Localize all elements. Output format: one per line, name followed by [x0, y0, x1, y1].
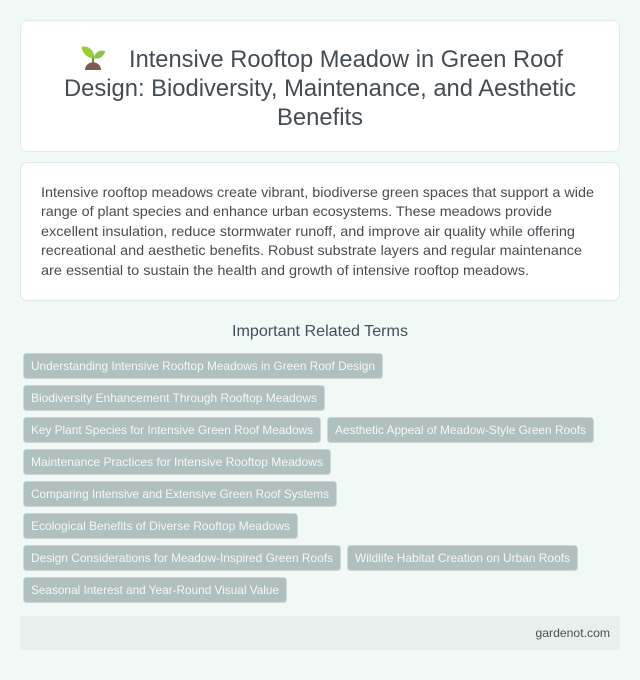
- title text: Design: Biodiversity, Maintenance, and Aesthetic: [64, 75, 576, 102]
- summary text: recreational and aesthetic benefits. Robust substrate layers and regular maintenance: [41, 242, 582, 258]
- tag: comparing: [24, 482, 336, 506]
- tag: design: Design Considerations for Meadow-Inspired Green Roofs: [31, 551, 333, 565]
- tag: understanding: Understanding Intensive Rooftop Meadows in Green Roof Design: [31, 359, 375, 373]
- tag: design: [24, 546, 340, 570]
- summary text: range of plant species and enhance urban ecosystems. These meadows provide: [41, 203, 552, 219]
- icon: seedling: [82, 46, 105, 70]
- panel: title card: [20, 20, 620, 152]
- title text: [64, 46, 576, 131]
- summary text: are essential to sustain the health and growth of intensive rooftop meadows.: [41, 262, 529, 278]
- tag: comparing: Comparing Intensive and Extensive Green Roof Systems: [31, 487, 329, 501]
- summary text: Intensive rooftop meadows create vibrant, biodiverse green spaces that support a wide: [41, 184, 594, 200]
- tag: maintenance: Maintenance Practices for Intensive Rooftop Meadows: [31, 455, 323, 469]
- panel: summary: [20, 162, 620, 300]
- summary text: excellent insulation, reduce stormwater runoff, and improve air quality while offering: [41, 223, 575, 239]
- tag: wildlife: Wildlife Habitat Creation on Urban Roofs: [355, 551, 570, 565]
- summary text: [41, 184, 594, 278]
- tag: wildlife: [348, 546, 578, 570]
- tag: plant species: [24, 418, 320, 442]
- title text: Benefits: [277, 104, 363, 131]
- footer: gardenot.com: [536, 626, 610, 640]
- tag: ecological: Ecological Benefits of Diverse Rooftop Meadows: [31, 519, 290, 533]
- tag: plant species: Key Plant Species for Intensive Green Roof Meadows: [31, 423, 313, 437]
- tag: ecological: [24, 514, 298, 538]
- tag: aesthetic appeal: [328, 418, 594, 442]
- tag: understanding: [24, 354, 382, 378]
- heading: related terms: Important Related Terms: [232, 323, 408, 340]
- tag: biodiversity: [24, 386, 324, 410]
- tag: seasonal: [24, 578, 286, 602]
- title text: Intensive Rooftop Meadow in Green Roof: [129, 46, 563, 73]
- footer: [20, 616, 620, 650]
- tag: seasonal: Seasonal Interest and Year-Round Visual Value: [31, 583, 279, 597]
- tag: biodiversity: Biodiversity Enhancement Through Rooftop Meadows: [31, 391, 317, 405]
- tag list: [24, 354, 594, 602]
- tag: maintenance: [24, 450, 330, 474]
- tag: aesthetic appeal: Aesthetic Appeal of Meadow-Style Green Roofs: [335, 423, 586, 437]
